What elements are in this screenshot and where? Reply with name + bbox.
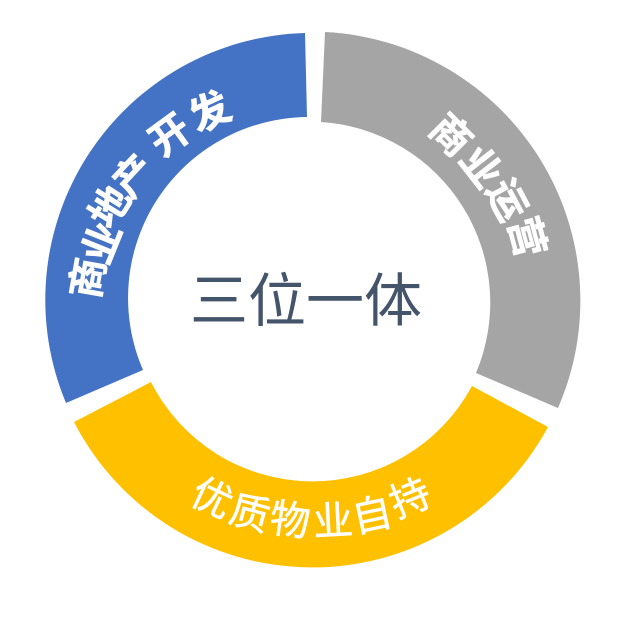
- yellow ring arc: [74, 382, 548, 567]
- label: 优质物业自持: 自: [348, 490, 396, 542]
- label: 优质物业自持: 物: [267, 496, 313, 546]
- label: 优质物业自持: 业: [312, 499, 354, 545]
- label: 商业运营: [421, 106, 552, 262]
- label: 商业运营: 运: [477, 172, 535, 228]
- label: 优质物业自持: 持: [384, 471, 437, 527]
- panel: 优质物业自持 (yellow segment): [74, 382, 548, 567]
- label: 商业地产开发: 业: [75, 217, 131, 270]
- label: 商业运营: 业: [451, 138, 510, 197]
- label: 优质物业自持: 优: [184, 471, 239, 527]
- grey ring arc: [321, 32, 580, 408]
- label: 商业地产开发: 商: [64, 255, 114, 302]
- label: 商业运营: 商: [421, 106, 480, 165]
- label: 商业地产开发: [64, 85, 238, 302]
- label: 商业地产开发: 开: [141, 106, 200, 165]
- label: 优质物业自持: [184, 471, 437, 546]
- blue ring arc: [45, 33, 307, 403]
- label: 优质物业自持: 质: [225, 488, 275, 540]
- label: 商业地产开发: 产: [105, 147, 164, 206]
- label: 商业地产开发: 地: [82, 179, 140, 236]
- panel: 商业地产开发 (blue segment): [45, 33, 307, 403]
- center title: 三位一体: [190, 269, 422, 334]
- panel: 商业运营 (grey segment): [321, 32, 580, 408]
- label: 商业地产开发: 发: [183, 85, 238, 141]
- label: 商业运营: 营: [500, 212, 552, 262]
